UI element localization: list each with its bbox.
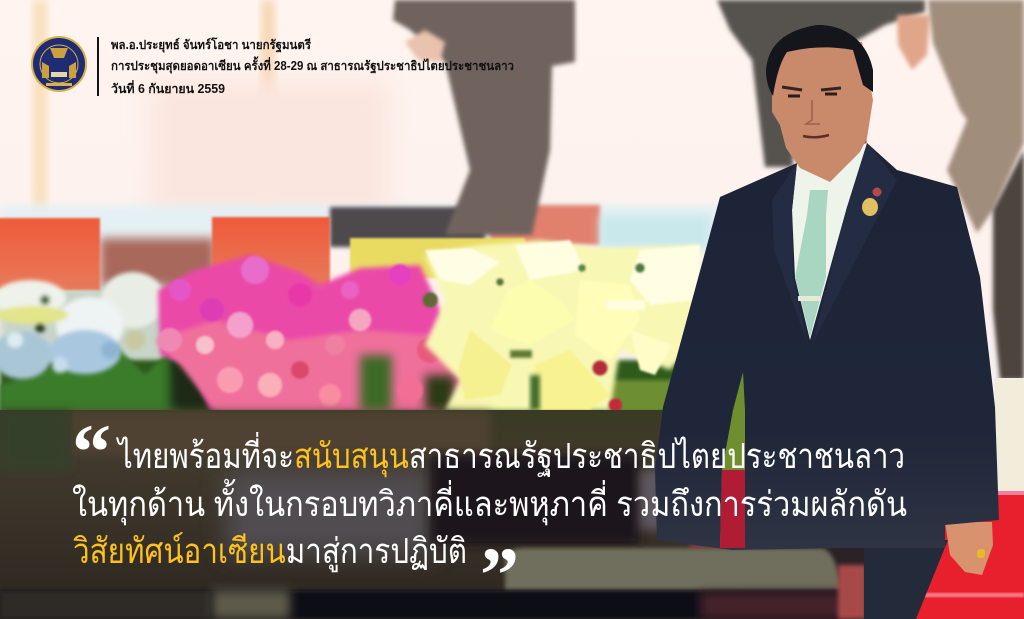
tie bbox=[795, 190, 828, 337]
neck bbox=[790, 130, 867, 195]
header bbox=[31, 36, 514, 96]
foliage bbox=[0, 345, 760, 445]
yellow staging block bbox=[350, 238, 525, 278]
trousers bbox=[864, 540, 948, 619]
background figures bbox=[393, 0, 1024, 380]
quote line 3: วิสัยทัศน์อาเซียนมาสู่การปฏิบัติ bbox=[73, 532, 467, 572]
shirt bbox=[792, 143, 868, 340]
lapels bbox=[772, 143, 897, 345]
header text: date: วันที่ 6 กันยายน 2559 bbox=[111, 80, 225, 96]
red podium boxes bbox=[0, 217, 330, 290]
dimmed caption band bbox=[0, 410, 870, 619]
header text: event: การประชุมสุดยอดอาเซียน ครั้งที่ 28-29 ณ สาธารณรัฐประชาธิปไตยประชาชนลาว bbox=[111, 56, 514, 74]
blue hydrangeas bbox=[0, 272, 165, 379]
right hand with ring bbox=[945, 522, 993, 575]
blurred foreground lectern bbox=[0, 548, 866, 619]
photo background: stage wall bbox=[0, 0, 1024, 420]
tie clip bbox=[798, 296, 820, 301]
emblem: government seal bbox=[31, 36, 87, 92]
flower arrangement bbox=[0, 238, 760, 445]
floor and red carpet bbox=[880, 378, 1024, 619]
quotation bbox=[72, 408, 907, 618]
main figure: prime minister walking bbox=[655, 25, 999, 619]
head bbox=[766, 25, 873, 182]
pink orchids bbox=[155, 255, 475, 412]
divider bar bbox=[97, 37, 99, 96]
gap between arm and body bbox=[720, 372, 745, 548]
suit jacket bbox=[655, 143, 999, 550]
closing quotation mark: ” bbox=[480, 531, 519, 618]
lapel pins bbox=[862, 188, 882, 216]
quote line 1: ไทยพร้อมที่จะสนับสนุนสาธารณรัฐประชาธิปไตยประชาชนลาว bbox=[115, 432, 905, 477]
opening quotation mark: “ bbox=[72, 408, 111, 495]
header text: name: พล.อ.ประยุทธ์ จันทร์โอชา นายกรัฐมนตรี bbox=[111, 37, 311, 53]
quote line 2: ในทุกด้าน ทั้งในกรอบทวิภาคี่และพหุภาคี่ รวมถึงการร่วมผลักดัน bbox=[72, 478, 907, 525]
white and yellow lilies bbox=[425, 240, 700, 412]
